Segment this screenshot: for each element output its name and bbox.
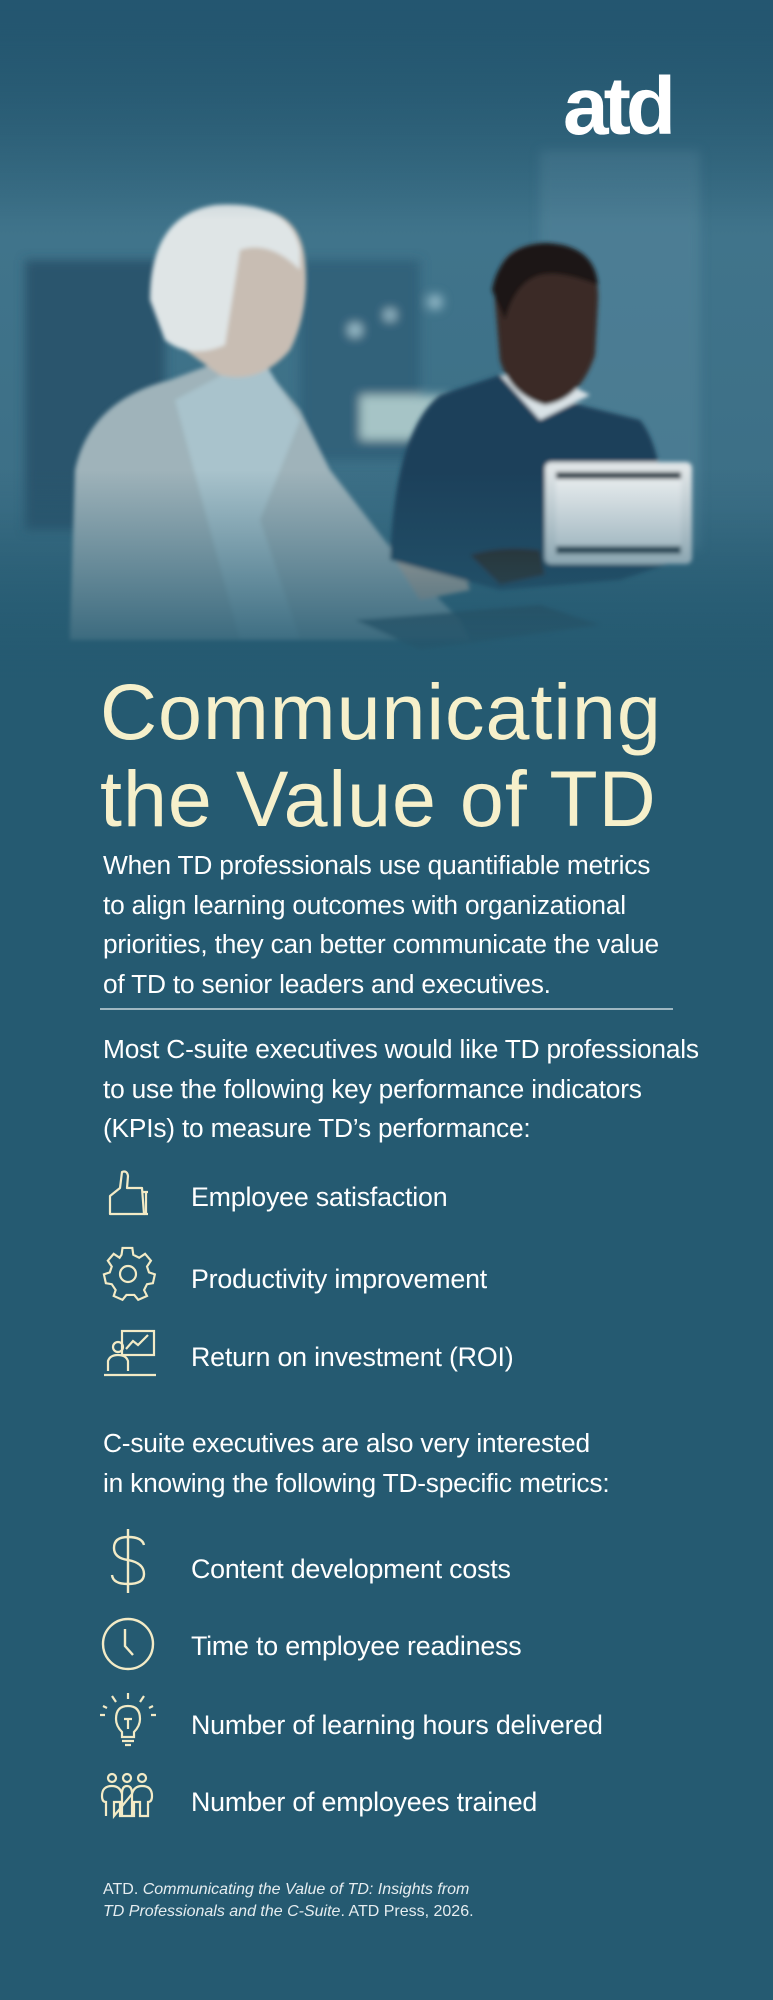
title: Communicating <box>100 667 662 756</box>
item: time to employee readiness: Time to employee readiness <box>191 1631 521 1661</box>
intro paragraph: priorities, they can better communicate the value <box>103 929 659 959</box>
KPI intro text: (KPIs) to measure TD’s performance: <box>103 1113 531 1143</box>
TD metrics intro text <box>103 1428 609 1498</box>
item: learning hours <box>100 1693 603 1746</box>
citation: ATD. Communicating the Value of TD: Insights from <box>103 1881 469 1898</box>
intro paragraph: of TD to senior leaders and executives. <box>103 968 551 998</box>
KPI intro text <box>103 1034 699 1143</box>
logo: atd: atd <box>563 61 671 152</box>
item: employee satisfaction: Employee satisfaction <box>191 1182 447 1212</box>
TD metrics list <box>100 1529 603 1819</box>
item: ROI <box>104 1330 513 1376</box>
citation <box>103 1881 474 1920</box>
title: the Value of TD <box>100 754 657 843</box>
intro paragraph: When TD professionals use quantifiable metrics <box>103 850 650 880</box>
KPI intro text: Most C-suite executives would like TD professionals <box>103 1034 699 1064</box>
item: productivity improvement: Productivity improvement <box>191 1264 487 1294</box>
title <box>100 667 662 843</box>
intro paragraph <box>103 850 659 998</box>
item: content development costs <box>110 1529 511 1593</box>
citation: TD Professionals and the C-Suite. ATD Press, 2026. <box>103 1903 474 1920</box>
TD metrics intro text: in knowing the following TD-specific metrics: <box>103 1468 609 1498</box>
item: employees trained <box>100 1772 537 1819</box>
KPI list <box>102 1170 513 1376</box>
item: learning hours: Number of learning hours delivered <box>191 1710 603 1740</box>
intro paragraph: to align learning outcomes with organizational <box>103 890 626 920</box>
item: employees trained: Number of employees trained <box>191 1787 537 1817</box>
item: ROI: Return on investment (ROI) <box>191 1342 513 1372</box>
item: content development costs: Content development costs <box>191 1554 511 1584</box>
KPI intro text: to use the following key performance indicators <box>103 1074 642 1104</box>
TD metrics intro text: C-suite executives are also very interested <box>103 1428 590 1458</box>
item: time to employee readiness <box>102 1618 521 1670</box>
item: productivity improvement <box>102 1246 487 1302</box>
item: employee satisfaction <box>108 1170 447 1216</box>
